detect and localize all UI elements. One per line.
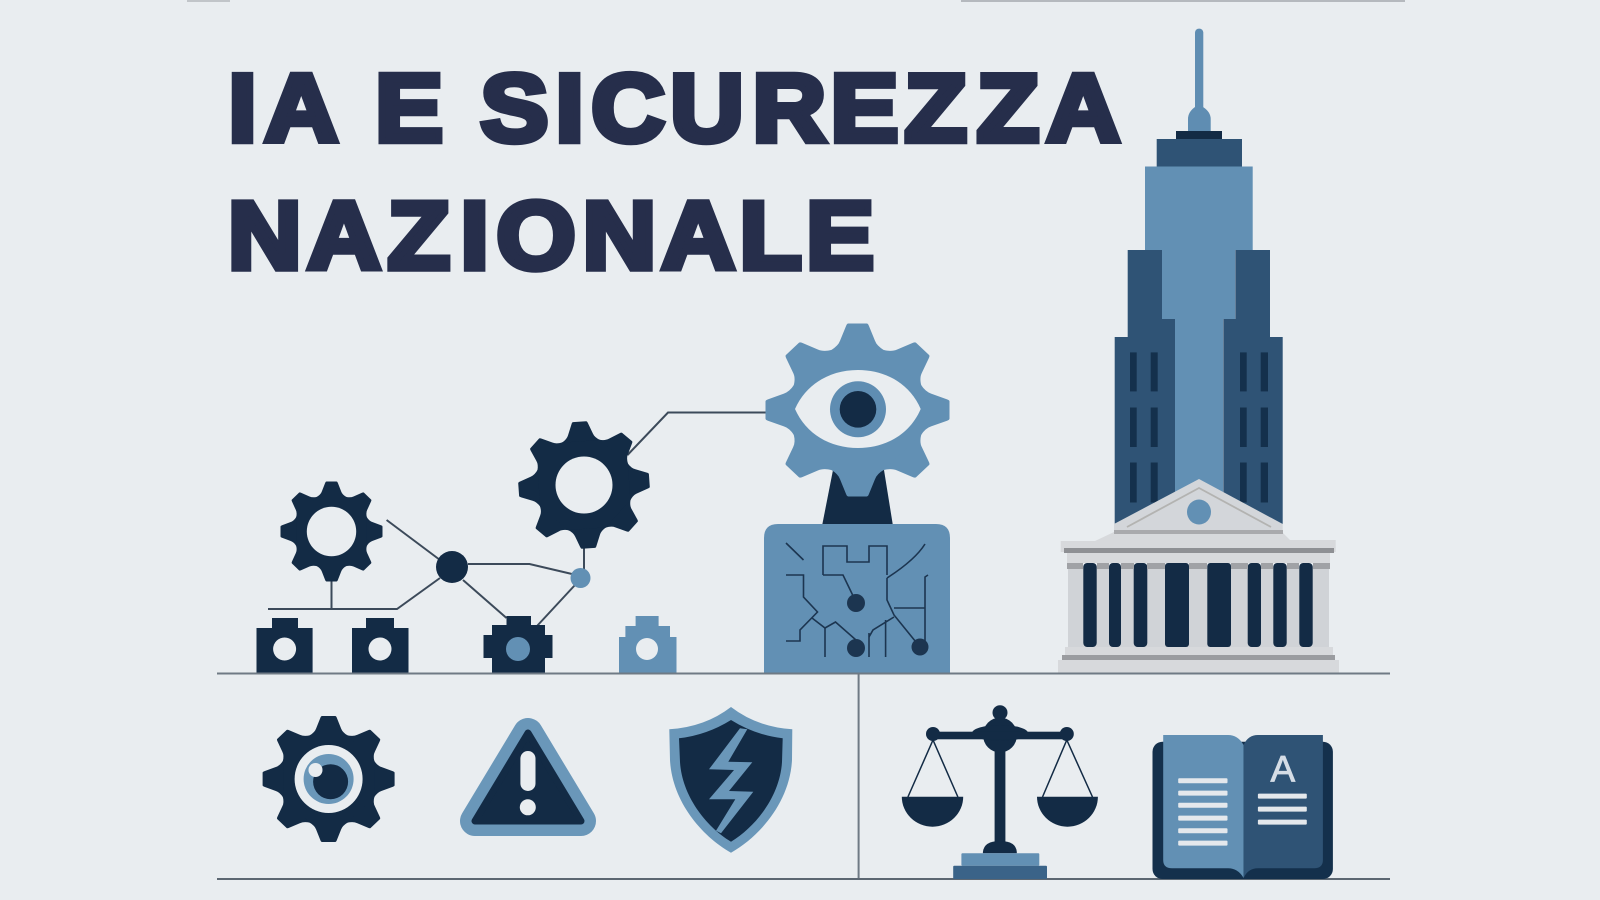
windows bbox=[1130, 352, 1268, 502]
circuit box bbox=[764, 524, 950, 673]
small camera block 1 bbox=[256, 618, 313, 673]
icon: shield with lightning bbox=[669, 707, 792, 853]
network connector lines bbox=[268, 412, 768, 626]
icon: scales of justice bbox=[902, 705, 1098, 879]
icon: warning triangle bbox=[475, 733, 581, 821]
network nodes bbox=[436, 551, 590, 588]
eye gear bbox=[766, 324, 950, 496]
small gear block dark bbox=[484, 616, 552, 673]
antenna bbox=[1195, 29, 1203, 114]
icon: eye gear bbox=[263, 716, 395, 842]
machine stand bbox=[822, 470, 893, 526]
skyscraper bbox=[1115, 29, 1283, 524]
small camera block 2 bbox=[352, 618, 408, 673]
small gear block blue bbox=[619, 616, 676, 673]
title: IA E SICUREZZA bbox=[228, 54, 1120, 161]
icon: open book: A bbox=[1271, 749, 1296, 790]
columns wall bbox=[1068, 566, 1329, 648]
panel dividers bbox=[217, 673, 1390, 879]
gear: medium bbox=[514, 417, 654, 553]
title bbox=[228, 54, 1120, 289]
steps bbox=[1065, 647, 1333, 656]
icon: open book bbox=[1152, 735, 1333, 879]
pediment bbox=[1114, 479, 1283, 531]
classical government building bbox=[1058, 479, 1339, 672]
title: NAZIONALE bbox=[228, 181, 874, 289]
gear: small left bbox=[280, 482, 382, 582]
surveillance machine bbox=[764, 324, 950, 673]
entablature bbox=[1061, 532, 1336, 563]
dark openings bbox=[1083, 563, 1313, 647]
